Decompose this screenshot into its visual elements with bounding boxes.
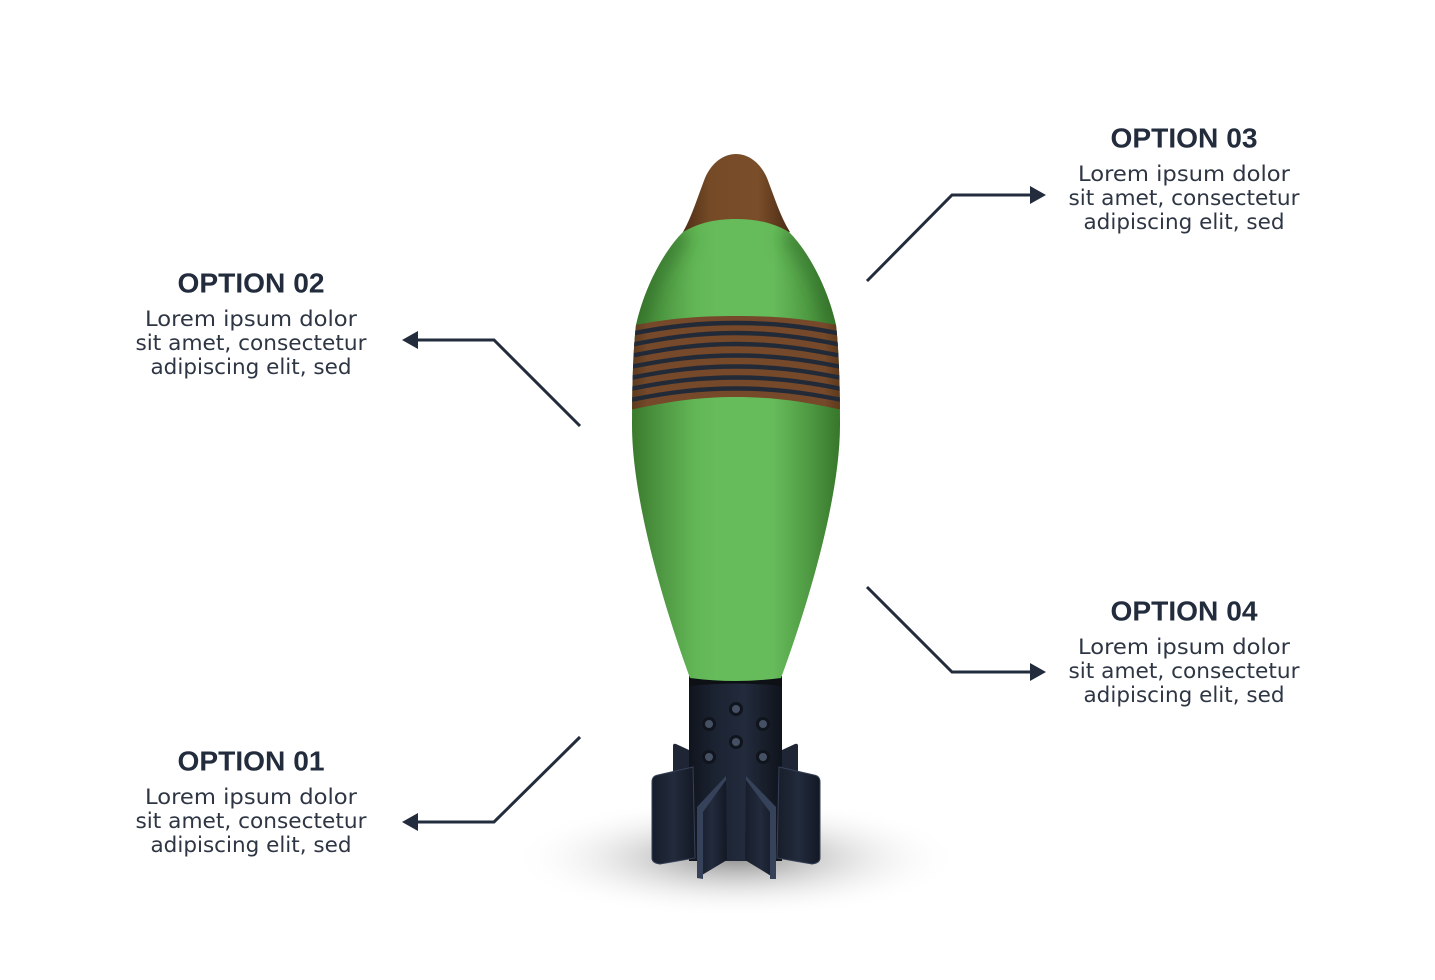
text block: option 04 (1068, 596, 1300, 707)
text block: option 04: adipiscing elit, sed (1084, 683, 1284, 707)
text block: option 04: OPTION 04 (1110, 596, 1258, 626)
text block: option 01 (136, 746, 367, 857)
text block: option 03: OPTION 03 (1110, 122, 1258, 154)
mortar shell (630, 154, 842, 879)
brown band (630, 316, 842, 410)
side fins (652, 767, 820, 864)
text block: option 02: Lorem ipsum dolor (145, 307, 357, 331)
text block: option 03: adipiscing elit, sed (1084, 210, 1284, 234)
text block: option 02: OPTION 02 (178, 268, 324, 298)
front fins (697, 776, 776, 879)
text block: option 04: Lorem ipsum dolor (1078, 635, 1290, 659)
green body (632, 219, 840, 681)
tail tube (689, 676, 782, 861)
text block: option 01: Lorem ipsum dolor (145, 785, 357, 809)
infographic (136, 128, 1300, 902)
upper body edge shading (632, 232, 840, 330)
arrow: option 04 (867, 587, 1046, 681)
rear fins (673, 744, 798, 775)
rivets (704, 704, 768, 762)
text block: option 03: sit amet, consectetur (1068, 186, 1300, 210)
text block: option 02: adipiscing elit, sed (150, 355, 352, 379)
text block: option 02: sit amet, consectetur (136, 331, 367, 355)
text block: option 01: sit amet, consectetur (136, 809, 367, 833)
arrow: option 02 (402, 331, 580, 426)
text block: option 03: Lorem ipsum dolor (1078, 162, 1290, 186)
text block: option 01: OPTION 01 (178, 746, 324, 776)
arrow: option 03 (867, 186, 1046, 281)
text block: option 03 (1068, 122, 1300, 234)
band stripes (630, 323, 842, 400)
text block: option 01: adipiscing elit, sed (150, 833, 352, 857)
nose cap (683, 154, 790, 250)
ground shadow (511, 798, 961, 918)
text block: option 02 (136, 268, 367, 379)
text block: option 04: sit amet, consectetur (1068, 659, 1300, 683)
arrow: option 01 (402, 737, 580, 831)
